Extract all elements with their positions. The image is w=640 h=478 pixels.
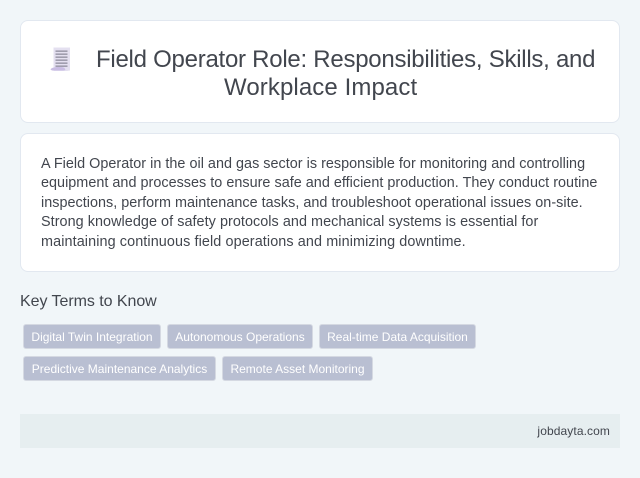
footer bar <box>20 414 620 448</box>
tag: Remote Asset Monitoring: Remote Asset Monitoring <box>230 362 365 376</box>
description text: A Field Operator in the oil and gas sector is responsible for monitoring and controlling <box>41 156 585 172</box>
heading: key terms: Key Terms to Know <box>20 293 157 310</box>
tag: Autonomous Operations <box>167 324 313 349</box>
tag: Real-time Data Acquisition <box>319 324 476 349</box>
panel: description card <box>20 133 620 272</box>
tag: Real-time Data Acquisition: Real-time Data Acquisition <box>327 330 468 344</box>
footer text: jobdayta.com <box>537 424 610 438</box>
description text: equipment and processes to ensure safe and efficient production. They conduct routine <box>41 175 597 191</box>
tag: Predictive Maintenance Analytics <box>23 356 216 381</box>
tag: Digital Twin Integration: Digital Twin Integration <box>31 330 153 344</box>
description text: maintaining continuous field operations and minimizing downtime. <box>41 234 466 250</box>
description text <box>41 156 597 250</box>
tag: Predictive Maintenance Analytics: Predictive Maintenance Analytics <box>32 362 207 376</box>
title: Field Operator Role: Responsibilities, Skills, and <box>96 46 595 73</box>
panel: title card <box>20 20 620 123</box>
tag: Digital Twin Integration <box>23 324 161 349</box>
tag: Remote Asset Monitoring <box>222 356 373 381</box>
tag: Autonomous Operations: Autonomous Operations <box>175 330 305 344</box>
title line 2: Workplace Impact <box>224 74 417 101</box>
icon: document scroll <box>50 48 70 71</box>
description text: Strong knowledge of safety protocols and mechanical systems is essential for <box>41 214 538 230</box>
description text: inspections, perform maintenance tasks, and troubleshoot operational issues on-site. <box>41 195 583 211</box>
